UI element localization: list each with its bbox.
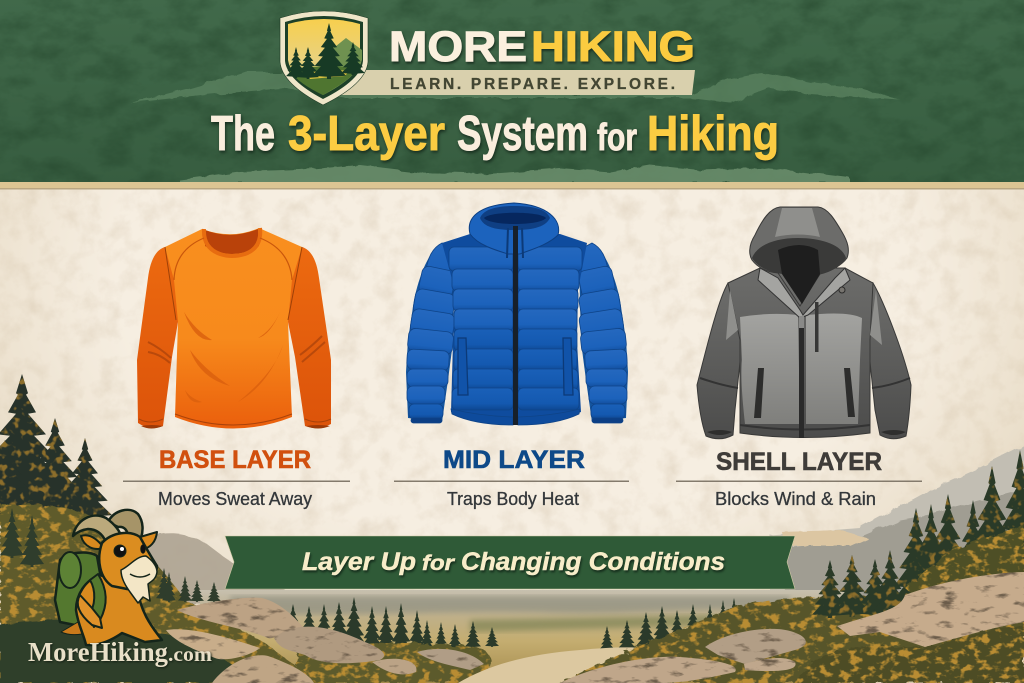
left dark foreground: [0, 620, 250, 683]
header bottom strip: [0, 182, 1024, 188]
trail: [458, 647, 660, 683]
smile: [130, 574, 150, 577]
title: for: [597, 117, 637, 159]
panel: shell layer: [676, 207, 922, 509]
caption: shell layer: Blocks Wind & Rain: [715, 489, 876, 509]
horn back: [108, 510, 143, 538]
heading: shell layer: SHELL LAYER: [716, 448, 882, 476]
heading: base layer: BASE LAYER: [159, 446, 311, 474]
title: System: [457, 107, 588, 161]
banner text: Layer Up: [302, 548, 416, 576]
site url: MoreHiking: [28, 637, 168, 667]
left hillside: [0, 505, 320, 683]
hood: [469, 203, 559, 254]
horn front: [73, 516, 121, 542]
left ear: [81, 535, 104, 549]
left sleeve: [406, 243, 457, 423]
icon: grey hooded shell jacket: [697, 207, 911, 439]
mascot: goat hiker: [55, 510, 162, 645]
right tree mass: [905, 525, 1024, 610]
heading: mid layer: MID LAYER: [443, 446, 585, 474]
logo wordmark: MORE: [389, 23, 527, 71]
right foreground bushes: [795, 625, 1024, 683]
banner text: [302, 548, 725, 576]
icon: orange long-sleeve shirt: [137, 228, 331, 428]
site url: .com: [168, 644, 212, 666]
banner: [225, 536, 795, 589]
divider: [394, 480, 629, 482]
title: The: [211, 107, 275, 161]
panel: mid layer: [394, 203, 629, 509]
valley: [200, 590, 860, 683]
distant hills left: [130, 533, 300, 610]
eye: [114, 545, 126, 557]
goat body: [76, 575, 162, 645]
muzzle and beard: [121, 556, 157, 603]
left small trees: [0, 508, 221, 602]
caption: base layer: Moves Sweat Away: [158, 489, 312, 509]
title: 3-Layer: [288, 107, 445, 161]
right sleeve: [577, 243, 628, 423]
logo ribbon: [340, 70, 695, 95]
green fields: [470, 615, 730, 632]
caption: mid layer: Traps Body Heat: [447, 489, 579, 509]
distant hills right: [770, 445, 1024, 610]
arm and strap: [88, 574, 106, 627]
right ear: [140, 532, 157, 549]
distant tree line left: [282, 597, 499, 653]
right rocks: [560, 572, 1024, 683]
divider: [123, 480, 350, 482]
right trees: [812, 450, 1024, 618]
banner text: Changing Conditions: [461, 548, 725, 576]
title: [211, 107, 779, 161]
lower mountain ridge: [180, 165, 850, 183]
backpack: [55, 553, 110, 630]
tail: [61, 622, 82, 635]
title: Hiking: [647, 107, 779, 161]
divider: [676, 480, 922, 482]
panel: base layer: [123, 228, 350, 509]
logo wordmark: [389, 23, 695, 71]
valley horizon band: [230, 596, 790, 614]
left rocks: [166, 598, 484, 683]
banner text: for: [422, 552, 456, 575]
right foliage band: [560, 590, 1024, 683]
logo badge: [280, 11, 695, 105]
logo tagline: LEARN. PREPARE. EXPLORE.: [390, 76, 675, 93]
foreground foliage mid: [290, 643, 491, 683]
pockets: [458, 338, 573, 395]
logo shield: [280, 11, 368, 105]
jacket body: [442, 234, 587, 424]
header band: [0, 0, 1024, 190]
landscape scene: [0, 374, 1024, 683]
logo wordmark: HIKING: [531, 23, 695, 71]
icon: blue puffer jacket: [406, 203, 628, 425]
left trees: [0, 374, 112, 520]
head: [99, 533, 157, 590]
upper mountain ridge: [130, 72, 900, 103]
distant tree line right: [600, 598, 742, 650]
